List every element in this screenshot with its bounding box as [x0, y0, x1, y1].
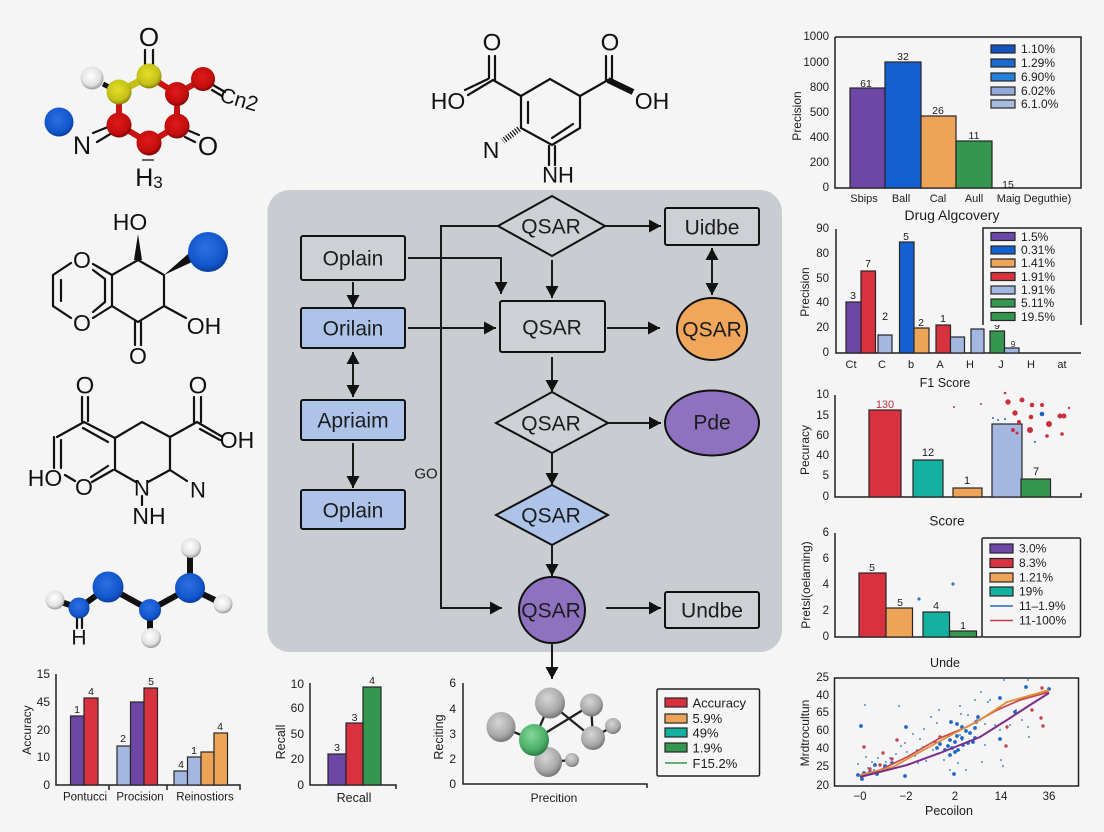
chart: precision grouped bars, F1 Score: C [878, 359, 886, 371]
chart: accuracy bars with scatter, Score: Score [929, 514, 965, 528]
box: Orilain: Orilain [323, 318, 383, 340]
chart: Recall bars: 60 [291, 701, 304, 715]
chart: scatter plot with trend lines: 36 [1043, 791, 1055, 803]
chart: precision grouped bars, F1 Score: at [1057, 359, 1067, 371]
chart: lower right bars with legend, Unde [799, 527, 1080, 670]
chart: precision grouped bars, F1 Score: H [1027, 359, 1035, 371]
chart: scatter plot with trend lines: 25 [816, 672, 829, 684]
chart: bottom left grouped bars, Accuracy [20, 667, 240, 804]
chart: bottom left grouped bars, Accuracy: Pontucci [63, 792, 107, 804]
chart: scatter plot with trend lines: 2 [952, 791, 958, 803]
chart: precision grouped bars, F1 Score: 20 [816, 322, 829, 334]
chart: precision grouped bars, F1 Score: 0 [823, 347, 829, 359]
legend: 5.11% [1021, 296, 1054, 310]
decision: top QSAR diamond: QSAR [521, 216, 581, 238]
chart: bottom left grouped bars, Accuracy: 1 [74, 704, 80, 716]
chart: accuracy bars with scatter, Score: 60 [816, 430, 829, 442]
chart: lower right bars with legend, Unde: 1 [960, 620, 966, 632]
chart: top-right bar chart, Drug Algcovery: 32 [897, 51, 909, 63]
molecule: dicarboxylic acid skeletal structure: O [601, 30, 619, 56]
chart: precision grouped bars, F1 Score: J [998, 359, 1004, 371]
legend: 3.0% [1019, 542, 1047, 556]
molecule: dicarboxylic acid skeletal structure: HO [431, 88, 465, 114]
legend: 5.9% [692, 711, 723, 726]
chart: molecular network with legend, Precition: 2 [449, 752, 456, 766]
chart: Recall bars: 3 [334, 742, 340, 754]
box: Undbe: Undbe [681, 600, 743, 622]
chart: lower right bars with legend, Unde: Pretsl(oelaming) [799, 541, 813, 629]
chart: precision grouped bars, F1 Score: 7 [865, 258, 871, 270]
box: central QSAR: QSAR [522, 316, 582, 340]
chart: scatter plot with trend lines: 65 [816, 707, 829, 719]
legend: 1.91% [1021, 283, 1055, 297]
node: Pde [665, 390, 759, 456]
molecule: bicyclic acid skeletal structure: N [190, 478, 206, 502]
legend: 49% [692, 726, 719, 740]
chart: lower right bars with legend, Unde: 0 [823, 631, 829, 643]
chart: top-right bar chart, Drug Algcovery: 61 [860, 78, 872, 90]
chart: top-right bar chart, Drug Algcovery: Precision [790, 91, 804, 141]
chart: bottom left grouped bars, Accuracy: 1 [191, 745, 197, 757]
molecule: bicyclic acid skeletal structure: NH [132, 503, 166, 529]
decision: blue QSAR diamond: QSAR [521, 504, 581, 528]
box: Uidbe: Uidbe [685, 216, 739, 240]
legend: 11–1.9% [1019, 599, 1066, 613]
chart: scatter plot with trend lines: −0 [853, 791, 867, 803]
molecule: ball-and-stick ring with sulfur atoms: N [73, 132, 91, 160]
molecule: bicyclic acid skeletal structure: O [76, 372, 94, 400]
chart: lower right bars with legend, Unde: 6 [823, 553, 829, 565]
chart: precision grouped bars, F1 Score: 9 [994, 320, 1000, 332]
chart: top-right bar chart, Drug Algcovery: Cal [930, 193, 946, 205]
molecule: dicarboxylic acid skeletal structure [431, 30, 669, 188]
chart: molecular network with legend, Precition: 0 [449, 777, 456, 791]
bars [846, 242, 1019, 353]
chart: precision grouped bars, F1 Score: H [966, 359, 974, 371]
chart: Recall bars: 0 [297, 778, 304, 792]
bars [859, 573, 976, 637]
molecule: bicyclic acid skeletal structure: N [134, 476, 150, 500]
molecule: fused ring with blue substituent: O [129, 343, 147, 369]
chart: accuracy bars with scatter, Score [798, 389, 1081, 528]
molecule: blue nitrogen chain [46, 538, 232, 650]
chart: lower right bars with legend, Unde: 5 [869, 562, 875, 574]
chart: top-right bar chart, Drug Algcovery: Sbips [850, 193, 878, 205]
legend: 11-100% [1019, 614, 1066, 628]
chart: Recall bars: 4 [369, 675, 375, 687]
legend: 0.31% [1021, 243, 1055, 257]
chart: lower right bars with legend, Unde: 6 [823, 527, 829, 539]
chart: bottom left grouped bars, Accuracy: Accuracy [20, 705, 34, 755]
chart: top-right bar chart, Drug Algcovery: Aull [965, 193, 983, 205]
legend: 1.29% [1021, 56, 1055, 70]
box: Uidbe [665, 208, 759, 245]
chart: molecular network with legend, Precition: 6 [449, 676, 456, 690]
chart: bottom left grouped bars, Accuracy: Reinostiors [176, 792, 234, 804]
chart: accuracy bars with scatter, Score: 1 [964, 475, 970, 487]
chart: accuracy bars with scatter, Score: 12 [922, 447, 934, 459]
chart: lower right bars with legend, Unde: 2 [823, 605, 829, 617]
legend: 6.1.0% [1021, 97, 1059, 111]
scatter dots [953, 392, 1070, 443]
legend: 1.9% [692, 740, 723, 756]
chart: bottom left grouped bars, Accuracy: 5 [148, 676, 154, 688]
chart: top-right bar chart, Drug Algcovery [790, 31, 1081, 223]
chart: top-right bar chart, Drug Algcovery: 1000 [803, 57, 829, 69]
chart: bottom left grouped bars, Accuracy: 4 [217, 721, 223, 733]
chart: lower right bars with legend, Unde: Unde [930, 656, 960, 670]
molecule: fused ring with blue substituent: OH [187, 313, 221, 339]
chart: accuracy bars with scatter, Score: 40 [816, 450, 829, 462]
chart: top-right bar chart, Drug Algcovery: 1000 [803, 31, 829, 43]
chart: scatter plot with trend lines [798, 672, 1078, 818]
bars [328, 687, 381, 785]
legend: F15.2% [692, 756, 738, 771]
chart: accuracy bars with scatter, Score: 10 [816, 389, 829, 401]
molecule: fused ring with blue substituent: HO [113, 209, 147, 235]
legend [991, 42, 1059, 111]
legend [983, 228, 1081, 325]
chart: Recall bars: Recall [337, 791, 371, 805]
chart: scatter plot with trend lines: 60 [816, 725, 829, 737]
legend: 6.02% [1021, 84, 1055, 98]
molecule: fused ring with blue substituent: O [73, 310, 91, 336]
node: purple QSAR [519, 577, 585, 643]
box: Oplain lower: Oplain [323, 500, 383, 522]
chart: top-right bar chart, Drug Algcovery: Ball [892, 193, 910, 205]
legend: 8.3% [1019, 556, 1047, 570]
bars [850, 62, 992, 188]
chart: molecular network with legend, Precition: Reciting [432, 714, 446, 760]
legend: 1.91% [1021, 270, 1055, 284]
chart: precision grouped bars, F1 Score: F1 Score [920, 376, 970, 390]
chart: molecular network with legend, Precition: 4 [449, 702, 456, 716]
chart: scatter plot with trend lines: −2 [899, 791, 913, 803]
chart: top-right bar chart, Drug Algcovery: 0 [823, 182, 829, 194]
chart: bottom left grouped bars, Accuracy: 15 [37, 667, 50, 681]
legend [982, 538, 1080, 637]
legend: 1.5% [1021, 230, 1049, 244]
chart: precision grouped bars, F1 Score: Precision [798, 267, 812, 317]
chart: precision grouped bars, F1 Score: b [908, 359, 914, 371]
chart: molecular network with legend, Precition: 3 [449, 727, 456, 741]
trend lines [860, 690, 1049, 777]
decision: middle QSAR diamond: QSAR [521, 412, 581, 436]
chart: accuracy bars with scatter, Score: 7 [1033, 466, 1039, 478]
decision: middle QSAR diamond [496, 392, 608, 453]
molecule: ball-and-stick ring with sulfur atoms: H [135, 164, 153, 192]
molecule: dicarboxylic acid skeletal structure: N [483, 137, 499, 163]
chart: precision grouped bars, F1 Score: A [936, 359, 944, 371]
legend: 6.90% [1021, 70, 1055, 84]
chart: accuracy bars with scatter, Score: 0 [823, 491, 829, 503]
arrows: flow connectors [353, 226, 712, 608]
molecule: grey network with green atom [486, 688, 621, 777]
panel: QSAR workflow flowchart [268, 190, 782, 652]
legend: 1.10% [1021, 42, 1055, 56]
box: central QSAR [500, 301, 605, 352]
chart: precision grouped bars, F1 Score: 50 [816, 273, 829, 285]
chart: precision grouped bars, F1 Score [798, 223, 1081, 390]
chart: bottom left grouped bars, Accuracy: 2 [120, 733, 126, 745]
node: orange QSAR [677, 298, 747, 360]
box: Apriaim [301, 400, 405, 440]
molecule: blue nitrogen chain: H [71, 626, 87, 650]
legend: 1.41% [1021, 256, 1055, 270]
decision: top QSAR diamond [498, 196, 605, 256]
chart: Recall bars: 3 [352, 712, 358, 724]
molecule: dicarboxylic acid skeletal structure: NH [542, 162, 574, 188]
chart: precision grouped bars, F1 Score: Ct [846, 359, 856, 371]
box: Orilain [301, 308, 405, 348]
chart: Recall bars: 50 [291, 727, 304, 741]
legend: 19.5% [1021, 310, 1055, 324]
chart: scatter plot with trend lines: 25 [816, 761, 829, 773]
molecule: ball-and-stick ring with sulfur atoms: 3 [153, 172, 163, 192]
chart: top-right bar chart, Drug Algcovery: Drug Algcovery [905, 207, 999, 223]
arrow: flowchart to network [551, 643, 553, 679]
label: GO: GO [414, 466, 438, 482]
chart: Recall bars: 20 [291, 752, 304, 766]
chart: scatter plot with trend lines: 20 [816, 780, 829, 792]
box: Oplain: Oplain [323, 248, 383, 270]
chart: precision grouped bars, F1 Score: 2 [882, 311, 888, 323]
chart: precision grouped bars, F1 Score: 9 [1011, 340, 1016, 349]
legend: 1.21% [1019, 570, 1053, 584]
chart: precision grouped bars, F1 Score: 40 [816, 297, 829, 309]
molecule: fused ring with blue substituent [53, 209, 228, 369]
chart: accuracy bars with scatter, Score: 5 [823, 470, 829, 482]
molecule: bicyclic acid skeletal structure: HO [28, 465, 62, 491]
decision: blue QSAR diamond [496, 485, 608, 545]
node: orange QSAR: QSAR [682, 318, 742, 342]
legend: 19% [1019, 584, 1043, 598]
molecule: bicyclic acid skeletal structure [28, 372, 254, 529]
chart: top-right bar chart, Drug Algcovery: 400 [810, 132, 829, 144]
molecule: bicyclic acid skeletal structure: OH [220, 427, 254, 453]
chart: scatter plot with trend lines: Pecoilon [925, 804, 973, 818]
box: Oplain [301, 236, 405, 280]
chart: top-right bar chart, Drug Algcovery: 800 [810, 82, 829, 94]
molecule: ball-and-stick ring with sulfur atoms: Cn2 [217, 84, 261, 116]
molecule: ball-and-stick ring with sulfur atoms: O [139, 22, 159, 52]
scatter points: blue [858, 680, 1049, 779]
chart: scatter plot with trend lines: 14 [995, 791, 1008, 803]
chart: bottom left grouped bars, Accuracy: 4 [178, 759, 184, 771]
chart: top-right bar chart, Drug Algcovery: Maig Deguthie) [997, 193, 1071, 205]
chart: top-right bar chart, Drug Algcovery: 11 [969, 130, 980, 142]
chart: top-right bar chart, Drug Algcovery: 26 [932, 105, 944, 117]
chart: bottom left grouped bars, Accuracy: 45 [37, 695, 50, 709]
chart: precision grouped bars, F1 Score: 1 [940, 313, 946, 325]
chart: scatter plot with trend lines: 40 [816, 743, 829, 755]
chart: scatter plot with trend lines: 40 [816, 690, 829, 702]
chart: top-right bar chart, Drug Algcovery: 500 [810, 107, 829, 119]
molecule: fused ring with blue substituent: O [73, 247, 91, 273]
molecule: bicyclic acid skeletal structure: O [75, 474, 93, 500]
molecule: dicarboxylic acid skeletal structure: O [483, 30, 501, 56]
chart: Recall bars [274, 675, 396, 805]
node: purple QSAR: QSAR [521, 600, 581, 622]
chart: molecular network with legend, Precition [432, 676, 760, 805]
molecule: ball-and-stick ring with sulfur atoms [44, 22, 261, 192]
chart: bottom left grouped bars, Accuracy: 0 [43, 778, 50, 792]
molecule: bicyclic acid skeletal structure: O [189, 372, 207, 400]
legend: Accuracy [692, 696, 746, 710]
scatter points: red [864, 688, 1045, 769]
chart: lower right bars with legend, Unde: 4 [823, 579, 830, 591]
box: Undbe [665, 592, 759, 628]
legend [657, 689, 760, 776]
box: Oplain lower [301, 490, 405, 529]
chart: bottom left grouped bars, Accuracy: 10 [37, 750, 50, 764]
chart: lower right bars with legend, Unde: 4 [933, 600, 939, 612]
molecule: dicarboxylic acid skeletal structure: OH [635, 88, 669, 114]
bars [70, 688, 228, 785]
chart: lower right bars with legend, Unde: 5 [897, 597, 903, 609]
chart: bottom left grouped bars, Accuracy: 20 [37, 723, 50, 737]
chart: scatter plot with trend lines: Mrdtrocultun [798, 700, 812, 766]
chart: top-right bar chart, Drug Algcovery: 15 [1002, 179, 1014, 191]
chart: precision grouped bars, F1 Score: 90 [816, 223, 829, 235]
node: Pde: Pde [693, 412, 731, 434]
bars [869, 410, 1050, 497]
molecule: ball-and-stick ring with sulfur atoms: O [198, 131, 218, 161]
chart: precision grouped bars, F1 Score: 5 [903, 231, 909, 243]
chart: top-right bar chart, Drug Algcovery: 200 [810, 157, 829, 169]
box: Apriaim: Apriaim [317, 410, 389, 432]
chart: Recall bars: Recall [274, 725, 288, 759]
chart: bottom left grouped bars, Accuracy: 4 [88, 686, 94, 698]
chart: accuracy bars with scatter, Score: 130 [876, 399, 894, 411]
chart: accuracy bars with scatter, Score: Pecuracy [798, 425, 812, 475]
chart: accuracy bars with scatter, Score: 15 [816, 410, 829, 422]
chart: Recall bars: 10 [291, 677, 304, 691]
chart: precision grouped bars, F1 Score: 80 [816, 248, 829, 260]
chart: precision grouped bars, F1 Score: 3 [850, 290, 856, 302]
chart: precision grouped bars, F1 Score: 2 [918, 317, 924, 329]
chart: bottom left grouped bars, Accuracy: Procision [116, 792, 164, 804]
chart: molecular network with legend, Precition: Precition [531, 791, 577, 805]
